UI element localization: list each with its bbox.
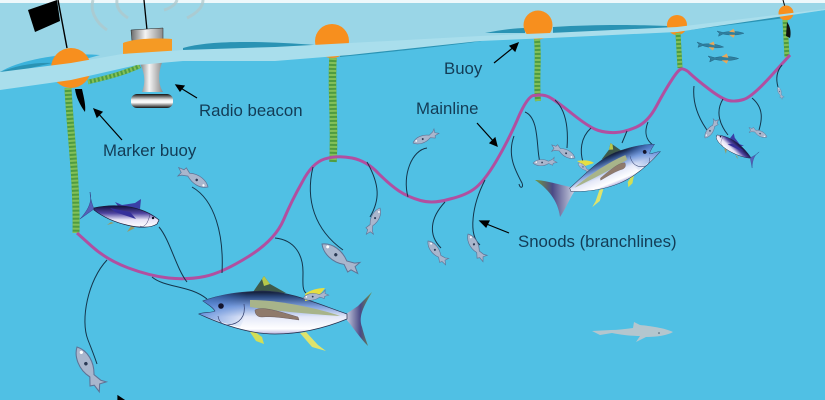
beacon cap [131,28,163,41]
mainline [77,55,790,279]
shark [592,322,673,342]
second tuna [535,127,670,217]
ropes [68,20,787,233]
arrows [94,43,518,400]
small tuna 2 [712,123,764,174]
radio beacon [88,0,173,108]
beacon base [131,94,173,108]
label: marker buoy: Marker buoy [103,141,197,160]
beacon collar [123,38,172,63]
marker buoy [28,0,91,112]
buoy 4 float [667,15,687,35]
antenna [144,0,147,30]
buoy float [51,48,91,88]
small tuna 1 [80,192,159,232]
icon: keel [75,89,85,112]
snoods [85,65,782,364]
icon: buoy 5 keel [786,22,791,38]
label: mainline: Mainline [416,99,478,118]
buoy 5 float [778,0,794,20]
buoy 3 float [524,10,552,40]
icon: flag [28,0,67,48]
connecting rope [88,66,140,82]
beacon stem [138,60,163,92]
surface fish school [696,29,744,64]
label: radio beacon: Radio beacon [199,101,303,120]
hooked bait near big tuna [302,288,329,301]
buoy 2 float [315,24,349,58]
water surface band [0,9,825,90]
sky band [0,2,825,80]
label: buoy: Buoy [444,59,483,78]
wave shading [0,15,785,75]
label: snoods: Snoods (branchlines) [518,232,677,251]
bait fish [71,86,785,394]
radio waves [92,0,203,30]
big tuna [199,276,372,351]
